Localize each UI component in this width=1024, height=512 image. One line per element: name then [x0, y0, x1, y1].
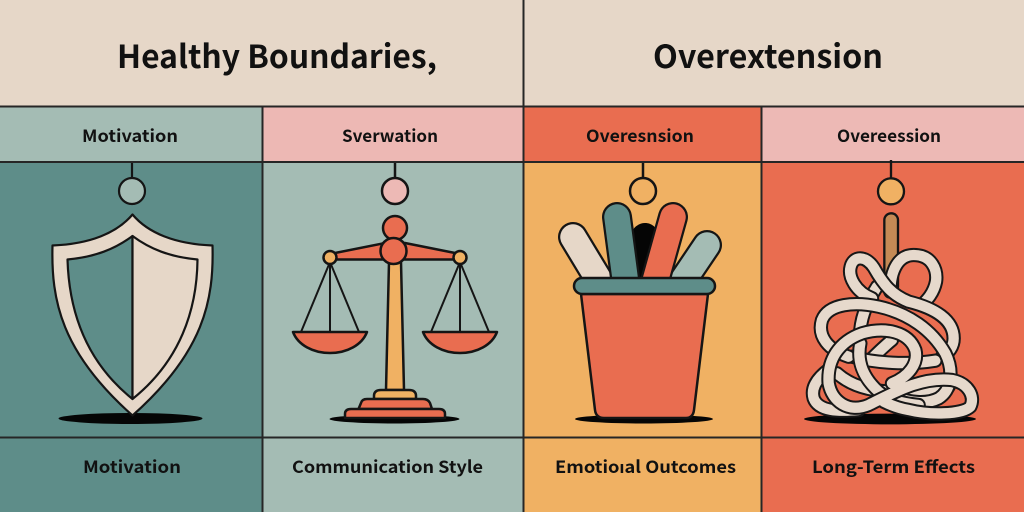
icon: tangled rope — [804, 160, 976, 424]
footer cell: Motivation — [0, 438, 263, 512]
footer cell: Long-Term Effects — [762, 438, 1024, 512]
panel: bucket background — [524, 162, 762, 438]
footer cell: Long-Term Effects: Long-Term Effects — [812, 453, 975, 478]
label cell: Overesnsion: Overesnsion — [586, 122, 694, 147]
label cell: Overeession: Overeession — [837, 122, 941, 147]
footer cell: Motivation: Motivation — [83, 453, 181, 478]
footer cell: Emotional Outcomes — [524, 438, 762, 512]
label cell: Motivation: Motivation — [82, 122, 178, 147]
title: right: Overextension — [653, 32, 883, 78]
panel: scales background — [263, 162, 524, 438]
footer cell: Communication Style — [263, 438, 524, 512]
panel: rope background — [762, 162, 1024, 438]
label cell: Motivation — [0, 107, 263, 162]
icon: shield connector — [119, 163, 145, 204]
footer cell: Emotional Outcomes: Emotioıal Outcomes — [555, 453, 736, 478]
footer cell: Communication Style: Communication Style — [292, 453, 483, 478]
label cell: Sverwation: Sverwation — [342, 122, 438, 147]
label cell: Sverwation — [263, 107, 524, 162]
icon: overflowing bucket — [573, 163, 715, 424]
label cell: Overesnsion — [524, 107, 762, 162]
panel: shield background — [0, 162, 263, 438]
header band — [0, 0, 1024, 107]
label cell: Overeession — [762, 107, 1024, 162]
title: left: Healthy Boundaries, — [117, 32, 437, 78]
icon: balance scale — [293, 163, 497, 424]
icon: shield — [52, 214, 213, 424]
